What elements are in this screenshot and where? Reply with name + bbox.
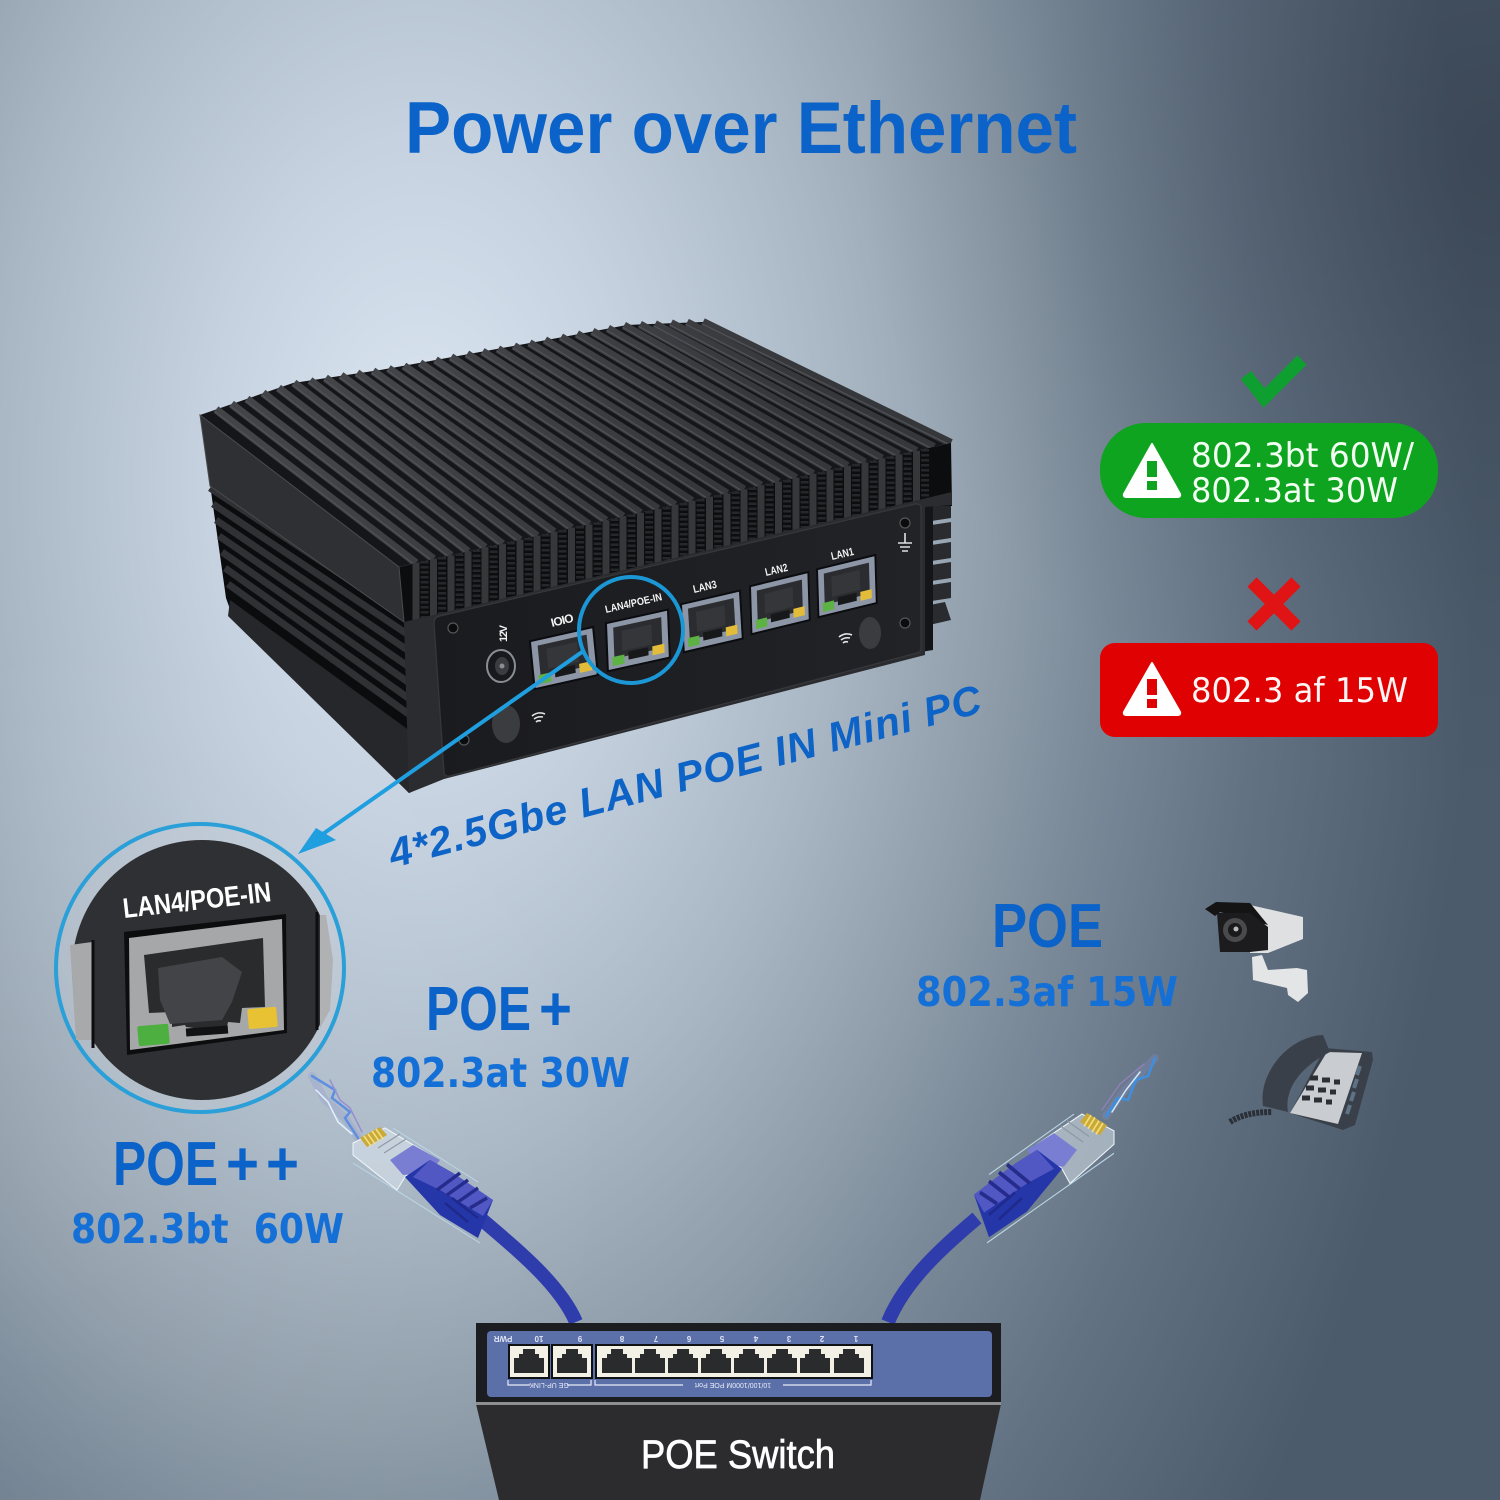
upside-down port numbers: 9 (577, 1334, 582, 1343)
icon: security camera (1205, 902, 1308, 1002)
RJ45 plug (353, 1127, 493, 1243)
POE++ heading: POE (113, 1130, 218, 1199)
left heavy plate (200, 415, 404, 622)
neighbouring port left (70, 942, 92, 1040)
POE++ heading: + (226, 1130, 259, 1199)
slanted device caption: 4*2.5Gbe LAN POE IN Mini PC (383, 676, 987, 877)
top heatsink fins (200, 322, 951, 567)
upside-down port numbers: 10 (534, 1334, 543, 1343)
wifi icons (532, 634, 852, 722)
right lightning sparks (1102, 1058, 1155, 1116)
upside-down port numbers: PWR (493, 1334, 512, 1343)
RJ45 plug (974, 1113, 1114, 1243)
icon: IP phone (1230, 1035, 1373, 1130)
label: port group: 10/100/1000M POE Port (695, 1381, 771, 1388)
warning icon (1124, 444, 1180, 497)
port: LAN1 (816, 554, 878, 618)
POE+ spec: 802.3at 30W (371, 1049, 630, 1097)
switch body (476, 1404, 1001, 1500)
port group 9 (551, 1344, 593, 1379)
port label: LAN4/POE-IN (121, 876, 273, 924)
upside-down port numbers: 4 (753, 1334, 758, 1343)
mini PC device (200, 322, 952, 793)
label: IOIO: IOIO (549, 611, 575, 630)
POE+ heading: POE (426, 975, 531, 1044)
left network cable (353, 1127, 576, 1322)
upside-down port numbers: 6 (686, 1334, 691, 1343)
upside-down port numbers: 2 (819, 1334, 824, 1343)
arrow to port detail (298, 652, 582, 854)
POE+ heading: + (539, 975, 572, 1044)
fin front ends (399, 443, 952, 623)
label: LAN3: LAN3 (692, 579, 718, 596)
port: LAN2 (749, 571, 811, 635)
front panel (434, 504, 921, 776)
port frame (124, 914, 287, 1055)
dark panel (72, 840, 332, 1100)
right network cable (888, 1113, 1114, 1322)
neighbour separators (93, 912, 317, 1048)
supported standards text: 802.3at 30W (1191, 471, 1398, 511)
POE++ spec: 802.3bt 60W (71, 1205, 344, 1253)
bracket lines (508, 1380, 871, 1385)
antenna knobs (492, 617, 881, 743)
label: LAN2: LAN2 (764, 562, 789, 579)
port: LAN3 (680, 589, 744, 653)
port: LAN4 (605, 608, 671, 672)
front body (404, 492, 952, 793)
left side ribbed wall (208, 470, 444, 793)
blue faceplate (487, 1331, 992, 1397)
ground symbol (898, 533, 912, 551)
switch name: POE Switch (641, 1433, 835, 1477)
compatibility: cross mark (1252, 582, 1296, 626)
yellow LED (247, 1007, 278, 1029)
upside-down port numbers: 8 (619, 1334, 624, 1343)
right side ribs (921, 503, 951, 652)
unsupported standard text: 802.3 af 15W (1191, 671, 1408, 711)
port cavity (144, 938, 265, 1032)
POE switch (476, 1323, 1001, 1500)
neighbouring port right (320, 915, 333, 1028)
upside-down port numbers: 3 (786, 1334, 791, 1343)
compatibility: check mark (1246, 360, 1302, 398)
label: 12V: 12V (498, 624, 510, 642)
screws (448, 518, 910, 745)
title: Power over Ethernet (405, 88, 1077, 169)
port: IOIO (529, 626, 599, 690)
left lightning sparks (312, 1076, 362, 1138)
label: GE UP-LINK: GE UP-LINK (529, 1381, 569, 1388)
upside-down port numbers: 5 (719, 1334, 724, 1343)
POE heading: POE (992, 892, 1103, 961)
warning icon (1124, 663, 1180, 715)
label: LAN4/POE-IN: LAN4/POE-IN (604, 591, 663, 616)
port detail callout (56, 824, 344, 1112)
green LED (137, 1024, 170, 1046)
port group 10 (508, 1344, 550, 1379)
compatibility: unsupported box (1100, 643, 1438, 737)
POE spec: 802.3af 15W (916, 968, 1178, 1016)
upside-down port numbers (493, 1334, 858, 1343)
upside-down port numbers: 7 (653, 1334, 658, 1343)
compatibility: supported pill (1100, 423, 1438, 518)
highlight ring on LAN4 port (579, 577, 683, 683)
label: LAN1: LAN1 (830, 546, 855, 563)
supported standards text: 802.3bt 60W/ (1191, 436, 1415, 476)
switch front frame (476, 1323, 1001, 1404)
upside-down port numbers: 1 (853, 1334, 858, 1343)
port group 1-8 (595, 1344, 873, 1379)
power jack (487, 650, 515, 682)
POE++ heading: + (266, 1130, 299, 1199)
